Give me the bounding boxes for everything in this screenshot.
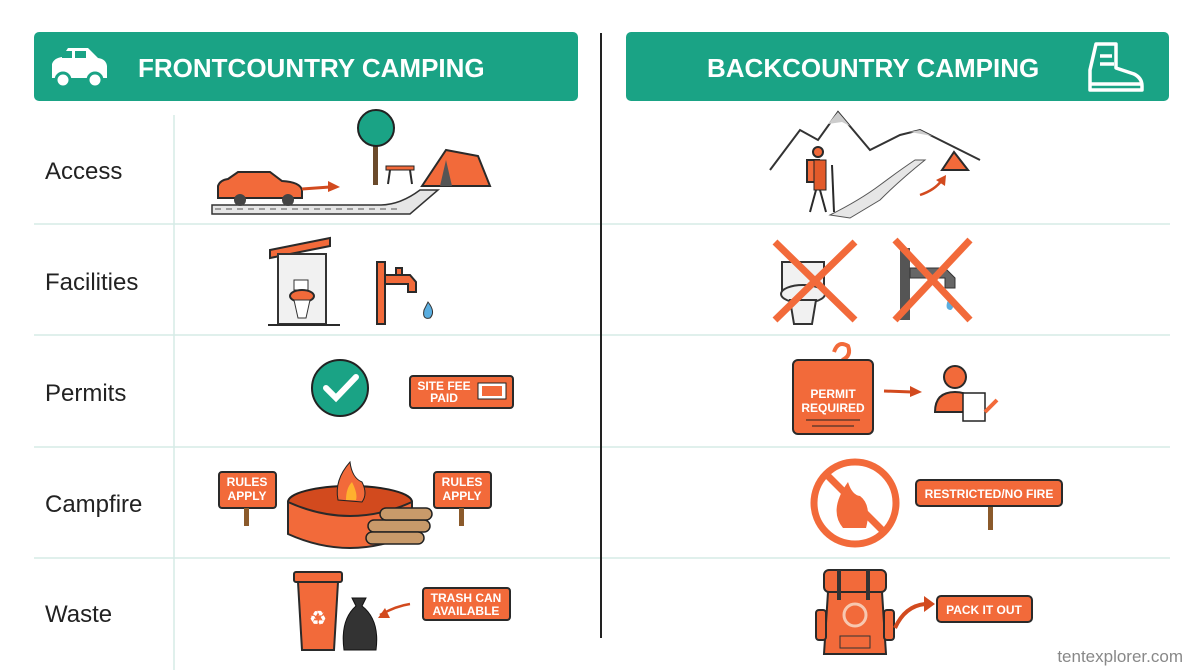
waste: front: TRASH CAN xyxy=(431,591,501,605)
row labels: Facilities xyxy=(45,269,138,296)
permits: back xyxy=(793,344,997,434)
header: frontcountry: FRONTCOUNTRY CAMPING xyxy=(138,53,485,83)
campfire: back: RESTRICTED/NO FIRE xyxy=(925,487,1053,501)
row labels: Permits xyxy=(45,380,126,407)
waste: front: ♻ xyxy=(309,608,327,630)
waste: front xyxy=(294,572,510,650)
row labels: Waste xyxy=(45,601,112,628)
campfire: front: APPLY xyxy=(228,489,266,503)
waste: back: PACK IT OUT xyxy=(946,603,1023,617)
waste: back xyxy=(816,570,1032,654)
row labels: Campfire xyxy=(45,491,142,518)
access: back xyxy=(770,112,980,218)
campfire: front: APPLY xyxy=(443,489,481,503)
permits: front xyxy=(312,360,513,416)
grid lines xyxy=(34,115,1170,670)
row labels xyxy=(45,158,142,628)
permits: front: SITE FEE xyxy=(417,379,471,393)
icon: boot xyxy=(1090,44,1142,90)
icon: car xyxy=(52,48,107,87)
campfire: front xyxy=(219,462,491,548)
facilities: back xyxy=(775,240,970,324)
header: frontcountry xyxy=(34,32,578,101)
permits: front: PAID xyxy=(430,391,458,405)
header: backcountry: BACKCOUNTRY CAMPING xyxy=(707,53,1039,83)
header: backcountry xyxy=(626,32,1169,101)
campfire: back xyxy=(814,462,1062,544)
row labels: Access xyxy=(45,158,122,185)
center divider xyxy=(600,33,602,638)
permits: back: PERMIT xyxy=(810,387,856,401)
waste: front: AVAILABLE xyxy=(433,604,499,618)
facilities: front xyxy=(268,238,433,325)
campfire: front: RULES xyxy=(227,475,267,489)
campfire: front: RULES xyxy=(442,475,482,489)
access: front xyxy=(212,110,490,214)
permits: back: REQUIRED xyxy=(801,401,865,415)
watermark: tentexplorer.com xyxy=(1057,647,1183,666)
